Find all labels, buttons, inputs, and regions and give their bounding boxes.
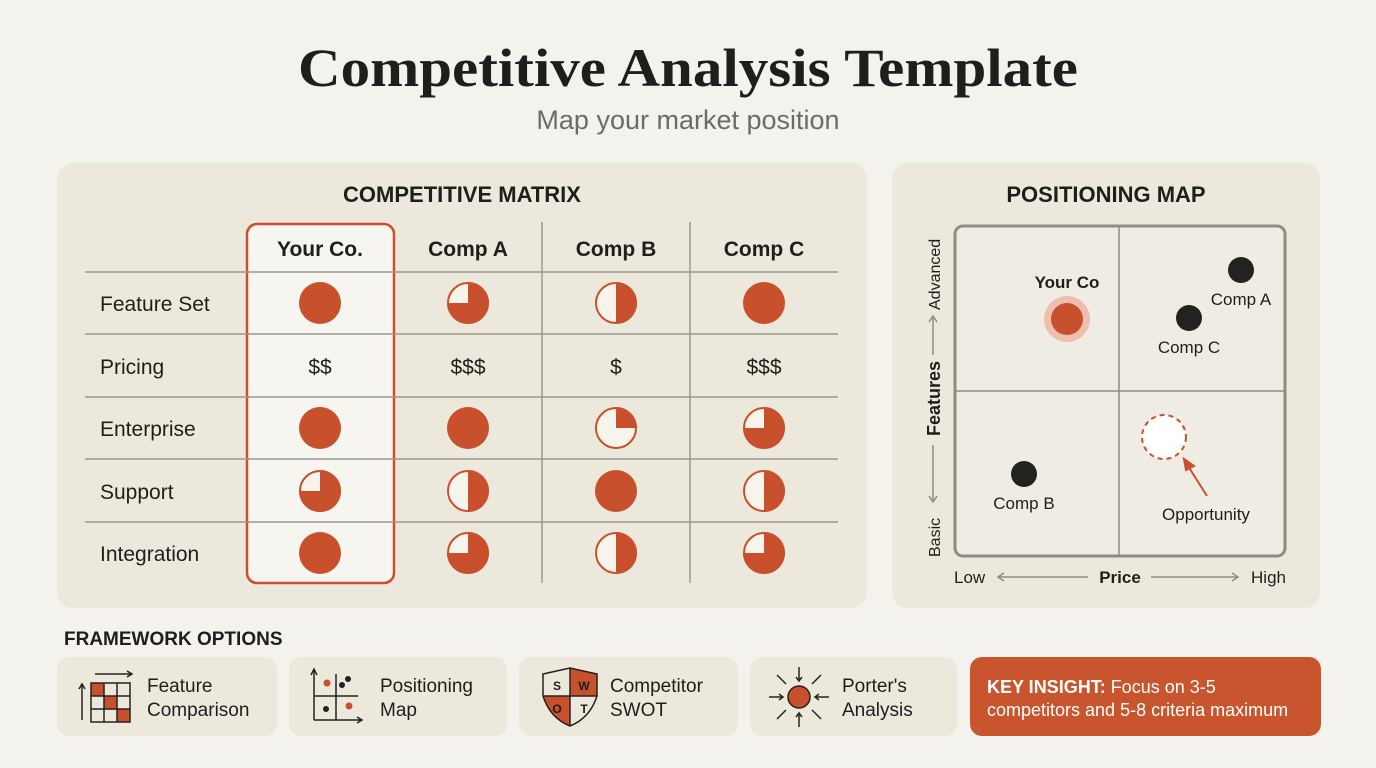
card: feature comparison (57, 657, 277, 736)
card: porter's analysis: Porter's (842, 676, 907, 697)
point: Comp B (993, 461, 1055, 513)
pricing values (308, 356, 782, 379)
row labels: Enterprise (100, 418, 196, 441)
opportunity (1142, 415, 1250, 524)
card: competitor SWOT: S (553, 679, 561, 693)
pricing values: $ (610, 356, 622, 379)
column headers: Comp A (428, 238, 508, 261)
point: Comp A (1211, 257, 1272, 309)
row labels: Feature Set (100, 293, 210, 316)
card: competitor SWOT: O (552, 702, 562, 716)
map heading: POSITIONING MAP (1006, 182, 1206, 207)
title: Competitive Analysis Template (298, 38, 1078, 98)
x axis label: Price (1099, 568, 1141, 587)
pricing values: $$ (308, 356, 332, 379)
framework heading: FRAMEWORK OPTIONS (64, 629, 282, 650)
y axis label: Advanced (927, 239, 944, 310)
point: Comp B: Comp B (993, 494, 1055, 513)
pricing values: $$$ (746, 356, 782, 379)
card: porter's analysis (750, 657, 957, 736)
point: Comp A: Comp A (1211, 290, 1272, 309)
point: Your Co (1035, 273, 1099, 342)
x axis label (954, 568, 1286, 587)
column headers: Comp B (576, 238, 656, 261)
card: porter's analysis: Analysis (842, 700, 913, 721)
column headers: Comp C (724, 238, 804, 261)
row labels (100, 293, 210, 566)
column headers: Your Co. (277, 238, 363, 261)
column headers (277, 238, 804, 261)
key insight callout: competitors and 5-8 criteria maximum (987, 700, 1288, 720)
card: competitor SWOT: Competitor (610, 676, 704, 697)
card: competitor SWOT: SWOT (610, 700, 667, 721)
card: feature comparison: Comparison (147, 700, 249, 721)
card: positioning map (289, 657, 507, 736)
panel: competitive matrix (57, 163, 867, 608)
card: feature comparison: Feature (147, 676, 212, 697)
row labels: Integration (100, 543, 199, 566)
subtitle: Map your market position (536, 105, 840, 135)
matrix heading: COMPETITIVE MATRIX (343, 182, 581, 207)
card: positioning map: Map (380, 700, 417, 721)
opportunity: Opportunity (1162, 505, 1250, 524)
point: Comp C: Comp C (1158, 338, 1220, 357)
y axis label: Features (924, 361, 944, 436)
panel: positioning map (892, 163, 1320, 608)
point: Comp C (1158, 305, 1220, 357)
row labels: Pricing (100, 356, 164, 379)
card: positioning map: Positioning (380, 676, 473, 697)
map grid (955, 226, 1285, 556)
row labels: Support (100, 481, 174, 504)
card: competitor SWOT: T (580, 702, 588, 716)
point: Your Co: Your Co (1035, 273, 1099, 292)
y axis label: Basic (927, 518, 944, 557)
key insight callout (970, 657, 1321, 736)
pricing values: $$$ (450, 356, 486, 379)
y axis label (924, 239, 944, 557)
card: competitor SWOT: W (578, 679, 590, 693)
x axis label: Low (954, 568, 986, 587)
key insight callout: KEY INSIGHT: Focus on 3-5 (987, 677, 1216, 697)
x axis label: High (1251, 568, 1286, 587)
highlight column: Your Co. (247, 224, 394, 583)
card: competitor SWOT (519, 657, 738, 736)
rating circles (299, 282, 785, 574)
